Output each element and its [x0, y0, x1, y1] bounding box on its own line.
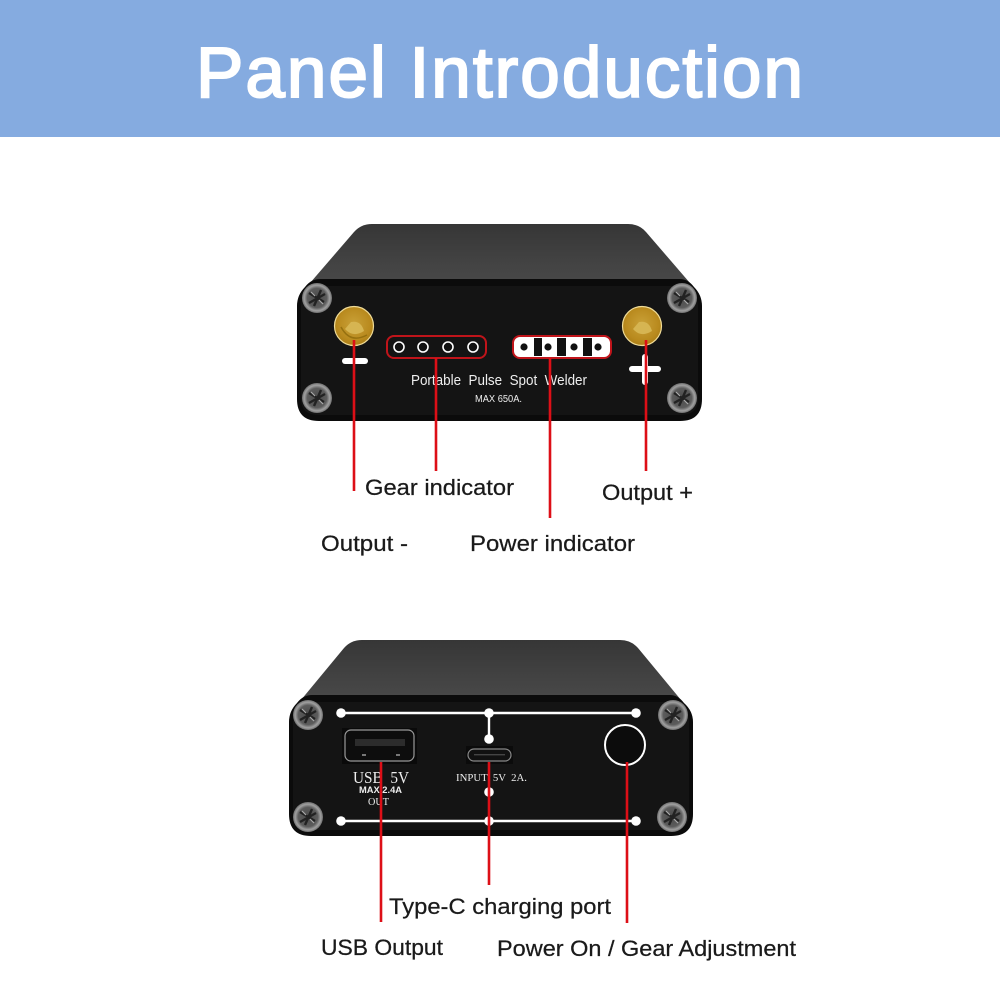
panel print — [411, 372, 587, 405]
callout lines: front panel — [354, 340, 646, 518]
device: rear panel with ports — [289, 640, 693, 836]
positive terminal — [622, 306, 662, 382]
gear indicator LEDs — [387, 336, 486, 358]
port print: MAX 2.4A — [359, 785, 402, 796]
label: Output +: Output + — [602, 480, 693, 505]
device: front panel with output terminals — [297, 224, 702, 421]
label: Output -: Output - — [321, 531, 408, 556]
top face — [304, 224, 696, 290]
label: Gear indicator: Gear indicator — [365, 475, 515, 500]
label: USB Output: USB Output — [321, 935, 444, 960]
USB port — [342, 728, 417, 764]
power indicator LEDs — [513, 336, 611, 358]
white printed lines — [336, 708, 641, 826]
port print: INPUT 5V 2A. — [456, 773, 527, 784]
screws — [302, 283, 697, 413]
panel print: Portable Pulse Spot Welder — [411, 372, 587, 389]
callout lines: rear panel — [381, 762, 627, 923]
power button — [605, 725, 645, 765]
port print: USB 5V — [353, 768, 410, 787]
label: Type-C charging port: Type-C charging port — [389, 894, 612, 919]
top face — [296, 640, 686, 706]
title: Panel Introduction — [196, 34, 803, 113]
port print: OUT — [368, 797, 389, 808]
panel print: MAX 650A. — [475, 394, 522, 405]
Type-C port — [466, 746, 513, 764]
label: Power On / Gear Adjustment: Power On / Gear Adjustment — [497, 936, 797, 961]
screws — [293, 700, 688, 832]
header banner — [0, 0, 1000, 137]
negative terminal — [334, 306, 374, 364]
port print — [353, 768, 527, 808]
rear face — [289, 695, 693, 836]
front face — [297, 279, 702, 421]
label: Power indicator: Power indicator — [470, 531, 636, 556]
